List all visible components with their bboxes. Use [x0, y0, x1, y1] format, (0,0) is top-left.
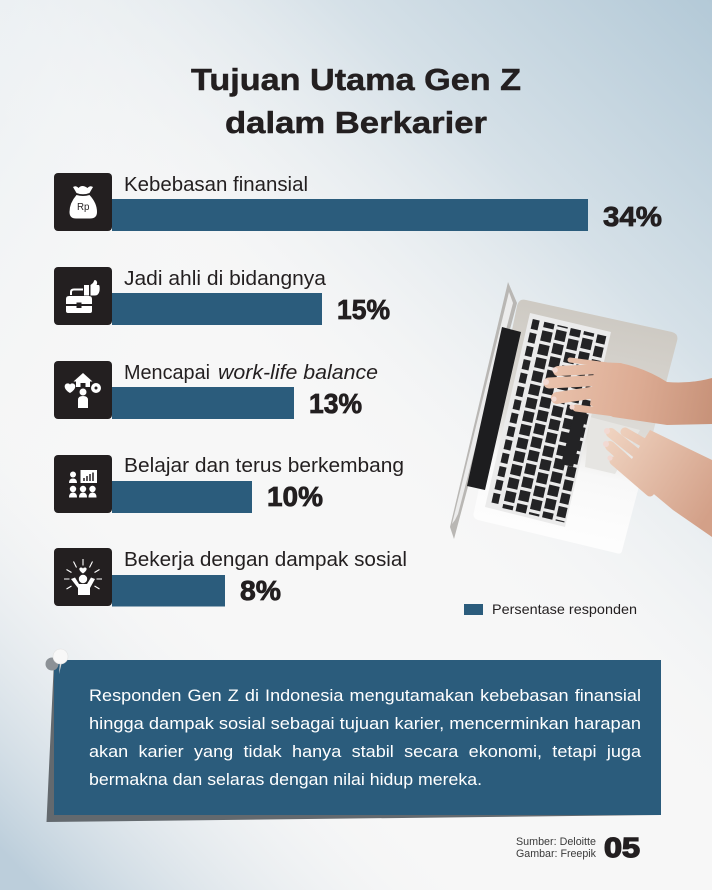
source credits: Sumber: Deloitte: [516, 836, 596, 848]
panel shadow: [46, 660, 661, 822]
bar row: Mencapai work-life balance 13%: work-life balance: [218, 362, 378, 384]
icon: pin: [46, 649, 68, 674]
bar row: Belajar dan terus berkembang 10%: [54, 455, 404, 513]
lower hand: [610, 430, 712, 537]
title: Tujuan Utama Gen Z: [191, 62, 521, 97]
icon: money bag: Rp: [77, 202, 90, 213]
bar row: Bekerja dengan dampak sosial 8%: [54, 548, 407, 606]
label: Bekerja dengan dampak sosial: [124, 549, 407, 571]
source credits: Gambar: Freepik: [516, 848, 596, 860]
panel body: [54, 660, 661, 815]
label: Jadi ahli di bidangnya: [124, 268, 327, 290]
fingernails: [543, 367, 613, 461]
value: 10%: [267, 481, 323, 512]
laptop screen edge: [450, 282, 517, 539]
callout text: bermakna dan selaras dengan nilai hidup mereka.: [89, 770, 482, 789]
source credits: [516, 836, 596, 860]
bar row: Kebebasan finansial 34%: [54, 173, 662, 232]
laptop base: [474, 300, 677, 554]
title: dalam Berkarier: [225, 105, 487, 140]
bar: [112, 481, 252, 513]
icon: money bag: [54, 173, 112, 231]
value: 13%: [309, 388, 362, 419]
legend: Persentase responden: [492, 601, 637, 617]
value: 8%: [240, 575, 281, 606]
bar: [112, 575, 225, 606]
bar: [112, 387, 294, 419]
bar: [112, 293, 322, 325]
illustration: laptop with hands: [450, 282, 712, 554]
bar: [112, 199, 588, 231]
label: Mencapai: [124, 362, 210, 384]
icon: person raising heart: [54, 548, 112, 606]
icon: home, heart, person, coin: [54, 361, 112, 419]
keys: [494, 320, 602, 521]
bar row: Jadi ahli di bidangnya 15%: [54, 267, 390, 325]
label: Belajar dan terus berkembang: [124, 455, 404, 477]
value: 15%: [337, 294, 390, 325]
label: Kebebasan finansial: [124, 174, 308, 196]
icon: briefcase and thumbs up: [54, 267, 112, 325]
value: 34%: [603, 201, 662, 232]
callout panel: [46, 649, 661, 822]
trackpad: [585, 417, 640, 474]
space bar: [561, 410, 587, 467]
upper hand: [549, 360, 712, 425]
callout text: akan karier yang tidak hanya stabil secara ekonomi, tetapi juga: [89, 742, 642, 761]
bar row: Mencapai work-life balance 13%: [54, 361, 378, 419]
icon: group with chart: [54, 455, 112, 513]
page number: 05: [604, 832, 640, 863]
callout text: [89, 686, 642, 789]
laptop hinge: [467, 327, 521, 490]
callout text: hingga dampak sosial sebagai tujuan karier, mencerminkan harapan: [89, 714, 641, 733]
keyboard plate: [485, 313, 611, 527]
callout text: Responden Gen Z di Indonesia mengutamakan kebebasan finansial: [89, 686, 641, 705]
title: [191, 62, 521, 140]
